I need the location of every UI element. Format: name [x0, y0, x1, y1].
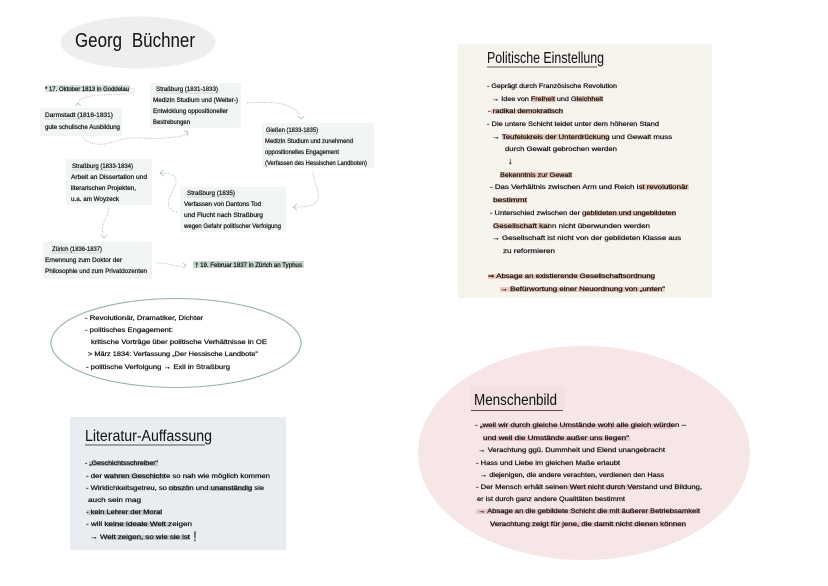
- text block: [85, 460, 271, 544]
- text block: - „weil wir durch gleiche Umstände wohl alle gleich würden –: [475, 422, 687, 429]
- text block: → Verachtung ggü. Dummheit und Elend unangebracht: [478, 447, 665, 454]
- title: Georg Büchner: Georg Büchner: [75, 30, 195, 52]
- text block: und weil die Umstände außer uns liegen": [483, 435, 629, 442]
- text block: → Welt zeigen, so wie sie ist: [90, 534, 190, 541]
- panel: overview ellipse: - politische Verfolgung → Exil in Straßburg: [86, 364, 231, 371]
- text block: ⇒ Absage an existierende Gesellschaftsordnung: [488, 273, 656, 280]
- timeline: Gießen: Gießen (1833-1835): [266, 127, 318, 134]
- text block: - Die untere Schicht leidet unter dem höheren Stand: [487, 121, 660, 128]
- timeline: Straßburg 1833-1834: Arbeit an Dissertation und: [71, 174, 148, 181]
- timeline: Zürich: [43, 242, 152, 279]
- timeline: Gießen: oppositionelles Engagement: [265, 149, 339, 156]
- panel: overview ellipse: - politisches Engagement:: [85, 327, 173, 334]
- heading: Menschenbild: Menschenbild: [474, 392, 557, 409]
- text block: - kein Lehrer der Moral: [86, 509, 162, 516]
- text block: - will keine ideale Welt zeigen: [86, 521, 193, 528]
- text block: - „Geschichtsschreiber": [85, 460, 158, 467]
- timeline: birth: * 17. Oktober 1813 in Goddelau: [45, 86, 130, 93]
- text block: - Geprägt durch Französische Revolution: [487, 83, 618, 90]
- timeline: Darmstadt: gute schulische Ausbildung: [45, 124, 121, 131]
- timeline: Zürich: Zürich (1836-1837): [52, 246, 102, 253]
- arrow: Gießen to Straßburg 1835: [293, 172, 318, 210]
- timeline: Zürich: Ernennung zum Doktor der: [45, 257, 122, 264]
- text block: [487, 83, 688, 293]
- timeline: Gießen: Medizin Studium und zunehmend: [265, 138, 354, 145]
- text block: - Das Verhältnis zwischen Arm und Reich ist revolutionär: [490, 184, 688, 191]
- title: Georg Büchner: [60, 16, 216, 68]
- panel: Menschenbild: [418, 346, 750, 560]
- arrow: birth to Darmstadt: [76, 88, 135, 106]
- text block: - Der Mensch erhält seinen Wert nicht durch Verstand und Bildung,: [476, 484, 702, 491]
- arrow: Straßburg 1835 to Straßburg 1833: [160, 170, 177, 212]
- text block: Gesellschaft kann nicht überwunden werden: [493, 223, 651, 230]
- timeline: Straßburg 1831-1833: [150, 83, 241, 128]
- arrow: Straßburg to Gießen: [247, 102, 304, 119]
- timeline: Straßburg 1833-1834: literarischen Projekten,: [71, 185, 136, 192]
- text block: → Befürwortung einer Neuordnung von „unten": [500, 286, 665, 293]
- arrow: Darmstadt to Straßburg: [82, 131, 188, 144]
- timeline: Straßburg 1835: und Flucht nach Straßburg: [184, 212, 264, 219]
- text block: - der wahren Geschichte so nah wie möglich kommen: [86, 473, 271, 480]
- timeline: Straßburg 1831-1833: Straßburg (1831-1833): [156, 86, 218, 93]
- text block: er ist durch ganz andere Qualitäten bestimmt: [477, 496, 625, 503]
- highlights: [87, 461, 252, 540]
- text block: auch sein mag: [88, 497, 142, 504]
- timeline: Straßburg 1831-1833: Entwicklung oppositioneller: [153, 108, 228, 115]
- timeline: Gießen: [262, 123, 374, 168]
- text block: - Wirklichkeitsgetreu, so obszön und unanständig sie: [86, 485, 265, 492]
- timeline: Straßburg 1835: [180, 187, 286, 232]
- heading: Menschenbild: [470, 386, 565, 410]
- text block: → diejenigen, die andere verachten, verdienen den Hass: [480, 472, 664, 479]
- text block: !: [193, 528, 197, 544]
- timeline: Straßburg 1831-1833: Bestrebungen: [153, 119, 191, 126]
- timeline: Straßburg 1835: Straßburg (1835): [187, 190, 235, 197]
- panel: overview ellipse: - Revolutionär, Dramatiker, Dichter: [85, 315, 203, 322]
- timeline: Darmstadt: Darmstadt (1816-1831): [45, 112, 113, 119]
- text block: Bekenntnis zur Gewalt: [500, 172, 572, 179]
- highlights: [488, 96, 689, 292]
- timeline: Straßburg 1831-1833: Medizin Studium und (Weiter-): [153, 97, 238, 104]
- text block: [475, 422, 702, 528]
- panel: overview ellipse: > März 1834: Verfassung „Der Hessische Landbote": [88, 351, 258, 358]
- text block: - Hass und Liebe im gleichen Maße erlaubt: [476, 460, 620, 467]
- highlights: [476, 424, 700, 527]
- text block: → Teufelskreis der Unterdrückung und Gewalt muss: [492, 134, 672, 141]
- heading: Politische Einstellung: Politische Einstellung: [487, 50, 604, 67]
- timeline: Straßburg 1835: wegen Gefahr politischer Verfolgung: [183, 223, 282, 230]
- arrow: Straßburg 1833 to Zürich: [101, 208, 108, 238]
- text block: - Unterschied zwischen der gebildeten und ungebildeten: [490, 210, 677, 217]
- panel: Politische Einstellung: [458, 44, 712, 298]
- text block: durch Gewalt gebrochen werden: [505, 146, 618, 153]
- text block: → Idee von Freiheit und Gleichheit: [492, 96, 603, 103]
- text block: zu reformieren: [503, 248, 556, 255]
- timeline: death: † 19. Februar 1837 in Zürich an Typhus: [195, 262, 302, 269]
- timeline: Straßburg 1833-1834: Straßburg (1833-1834): [72, 163, 133, 170]
- timeline: Zürich: Philosophie und zum Privatdozenten: [45, 268, 148, 275]
- text block: - radikal demokratisch: [488, 108, 564, 115]
- panel: Literatur-Auffassung: [70, 417, 286, 550]
- timeline: Straßburg 1833-1834: [66, 159, 152, 205]
- heading: Literatur-Auffassung: Literatur-Auffassung: [85, 428, 212, 445]
- timeline: Straßburg 1833-1834: u.a. am Woyzeck: [71, 196, 120, 203]
- panel: overview ellipse: [51, 298, 301, 388]
- timeline: Darmstadt: [40, 108, 122, 136]
- text block: bestimmt: [493, 197, 527, 204]
- panel: overview ellipse: kritische Vorträge über politische Verhältnisse in OE: [91, 339, 267, 346]
- timeline: Straßburg 1835: Verfassen von Dantons Tod: [184, 201, 262, 208]
- timeline: Gießen: (Verfassen des Hessischen Landboten): [265, 160, 367, 167]
- text block: Verachtung zeigt für jene, die damit nicht dienen können: [490, 521, 687, 528]
- text block: ↓: [508, 156, 512, 166]
- text block: → Gesellschaft ist nicht von der gebildeten Klasse aus: [492, 235, 681, 242]
- text block: → Absage an die gebildete Schicht die mit äußerer Betriebsamkeit: [478, 508, 700, 515]
- arrow: Zürich to death: [157, 263, 186, 268]
